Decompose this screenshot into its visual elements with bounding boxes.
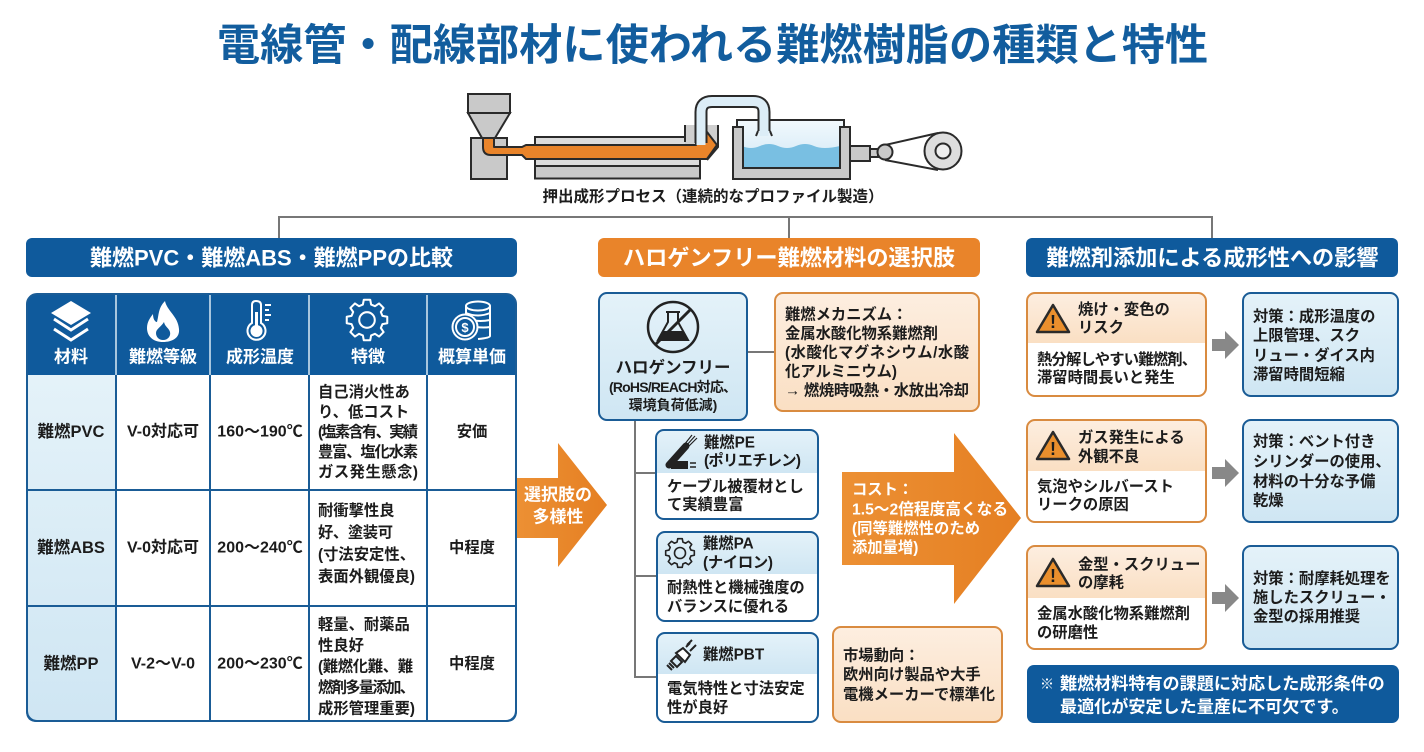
panel: market trend: 市場動向： [843, 646, 920, 664]
arrow: options diversity: 多様性 [532, 506, 584, 526]
icon: warning [1037, 432, 1069, 459]
row: 難燃PVC: ガス発生懸念) [318, 463, 418, 481]
card: 難燃PE: 難燃PE [704, 434, 755, 452]
row: 難燃ABS: (寸法安定性、 [318, 546, 415, 564]
solution: vented cylinder: シリンダーの使用、 [1253, 452, 1391, 470]
solution: temperature control: リュー・ダイス内 [1253, 346, 1375, 364]
arrow: cost: コスト： [852, 482, 913, 498]
icon: flame [147, 301, 179, 342]
panel: halogen free [599, 293, 747, 420]
hopper [468, 94, 510, 179]
row: 難燃PVC: 160〜190℃ [217, 424, 303, 440]
solution: wear resistant: 施したスクリュー・ [1253, 588, 1391, 606]
issue card: gas: リークの原因 [1037, 496, 1129, 514]
haul-off roller and belt [850, 132, 962, 170]
cooling pipe [701, 102, 772, 145]
icon: warning: ! [1050, 566, 1056, 586]
arrow: cost [842, 433, 1021, 604]
panel: halogen free: ハロゲンフリー [615, 358, 731, 377]
icon: warning [1037, 305, 1069, 332]
issue card: wear: の研磨性 [1037, 624, 1098, 642]
card: 難燃PA: 難燃PA [703, 534, 754, 552]
solution: wear resistant: 金型の採用推奨 [1253, 608, 1360, 626]
arrow [1212, 584, 1239, 612]
row: 難燃ABS: 耐衝撃性良 [318, 502, 394, 520]
row: 難燃PP [43, 616, 495, 718]
table header labels: 材料 [54, 348, 88, 366]
row: 難燃ABS: 難燃ABS [37, 538, 105, 557]
panel: flame retardant mechanism: 金属水酸化物系難燃剤 [785, 324, 938, 342]
row: 難燃PP: (難燃化難、難 [318, 658, 413, 676]
solution: vented cylinder: 乾燥 [1253, 492, 1284, 510]
row: 難燃PP: 燃剤多量添加、 [318, 678, 415, 696]
arrow: options diversity [517, 443, 607, 567]
issue card: burn and discoloration [1027, 293, 1206, 396]
solution: temperature control: 対策：成形温度の [1253, 308, 1375, 326]
panel: halogen free: (RoHS/REACH対応、 [609, 379, 737, 395]
card: 難燃PE [656, 430, 818, 519]
panel: comparison table [27, 294, 516, 721]
issue card: burn and discoloration: 焼け・変色の [1078, 300, 1170, 318]
issue card: burn and discoloration: 滞留時間長いと発生 [1037, 368, 1175, 386]
arrow [1212, 331, 1239, 359]
extruder barrel [535, 125, 718, 178]
issue card: wear: の摩耗 [1078, 574, 1124, 592]
row: 難燃PVC: り、低コスト [318, 404, 409, 421]
icon: warning: ! [1050, 312, 1056, 332]
row: 難燃PP: 中程度 [449, 654, 495, 672]
card: 難燃PA: (ナイロン) [703, 554, 773, 572]
solution: wear resistant: 対策：耐摩耗処理を [1253, 570, 1391, 588]
solution: temperature control: 上限管理、スク [1253, 326, 1360, 344]
card: 難燃PE: て実績豊富 [667, 496, 744, 514]
solution: wear resistant [1243, 546, 1398, 649]
icon: no halogen flask [648, 302, 698, 352]
panel: market trend [833, 627, 1002, 722]
table header labels: 特徴 [351, 348, 385, 366]
card: 難燃PA [657, 532, 818, 621]
card: 難燃PBT [657, 633, 818, 722]
icon: warning [1037, 559, 1069, 586]
row: 難燃PVC: 難燃PVC [38, 422, 105, 441]
solution: vented cylinder: 対策：ベント付き [1253, 432, 1375, 450]
card: 難燃PBT: 難燃PBT [703, 646, 765, 664]
arrow: cost: 1.5〜2倍程度高くなる [852, 500, 1008, 518]
row: 難燃PP: 難燃PP [43, 654, 99, 673]
solution: vented cylinder: 材料の十分な予備 [1253, 472, 1375, 490]
card: 難燃PA: バランスに優れる [667, 598, 789, 616]
row: 難燃ABS: V-0対応可 [127, 538, 199, 556]
row: 難燃PVC: 自己消火性あ [318, 383, 410, 401]
heading: moldability: 難燃剤添加による成形性への影響 [1046, 246, 1379, 270]
panel: flame retardant mechanism: → 燃焼時吸熱・水放出冷却 [785, 382, 969, 400]
icon: gear [666, 539, 694, 567]
panel: flame retardant mechanism [775, 293, 979, 411]
table header labels: 概算単価 [438, 346, 506, 366]
heading: comparison: 難燃PVC・難燃ABS・難燃PPの比較 [90, 246, 453, 270]
issue card: gas: 外観不良 [1078, 448, 1139, 466]
table header labels: 成形温度 [226, 346, 294, 366]
icon: warning: ! [1050, 439, 1056, 459]
issue card: wear: 金型・スクリュー [1078, 556, 1200, 574]
row: 難燃PVC: V-0対応可 [127, 422, 199, 440]
row: 難燃ABS: 200〜240℃ [217, 540, 303, 556]
row: 難燃ABS: 表面外観優良) [318, 568, 415, 586]
solution: vented cylinder [1243, 420, 1398, 522]
footer note: 難燃材料特有の課題に対応した成形条件の [1060, 674, 1385, 694]
row: 難燃PVC: 豊富、塩化水素 [318, 443, 418, 461]
icon: layers [51, 301, 91, 340]
row: 難燃PVC: 安価 [457, 422, 487, 440]
row: 難燃PP: 性良好 [318, 636, 364, 654]
panel: halogen free: 環境負荷低減) [629, 397, 717, 413]
title: 電線管・配線部材に使われる難燃樹脂の種類と特性 [217, 22, 1208, 70]
icon: thermometer [248, 301, 271, 340]
row: 難燃ABS: 好、塗装可 [318, 524, 393, 542]
icon: coins: $ [461, 320, 469, 335]
row: 難燃PVC: (塩素含有、実績 [318, 423, 418, 441]
row: 難燃PVC [38, 383, 487, 481]
issue card: burn and discoloration: リスク [1078, 320, 1124, 336]
footer note: 最適化が安定した量産に不可欠です。 [1060, 696, 1349, 716]
panel: market trend: 欧州向け製品や大手 [843, 666, 981, 684]
card: 難燃PBT: 性が良好 [667, 698, 728, 716]
panel: flame retardant mechanism: 難燃メカニズム： [785, 306, 907, 324]
heading: halogen-free: ハロゲンフリー難燃材料の選択肢 [623, 246, 955, 270]
issue card: wear: 金属水酸化物系難燃剤 [1037, 604, 1190, 622]
panel: market trend: 電機メーカーで標準化 [843, 686, 995, 704]
arrow: cost: (同等難燃性のため [852, 520, 980, 538]
heading: comparison [26, 238, 517, 277]
issue card: wear [1027, 546, 1206, 649]
icon: plug [667, 640, 696, 670]
card: 難燃PA: 耐熱性と機械強度の [667, 578, 805, 596]
icon: cable [669, 435, 697, 467]
row: 難燃PP: 成形管理重要) [318, 700, 415, 718]
icon: gear [347, 300, 387, 340]
card: 難燃PE: ケーブル被覆材とし [667, 478, 804, 496]
table header labels [54, 346, 506, 366]
card: 難燃PBT: 電気特性と寸法安定 [667, 680, 805, 698]
table header labels: 難燃等級 [129, 346, 197, 366]
footer note: ※ [1040, 676, 1054, 692]
row: 難燃PP: 軽量、耐薬品 [318, 616, 410, 634]
row: 難燃PP: 200〜230℃ [217, 656, 303, 672]
row: 難燃ABS [37, 502, 495, 586]
heading: moldability [1026, 238, 1398, 277]
issue card: gas: ガス発生による [1078, 428, 1185, 446]
card: 難燃PE: (ポリエチレン) [704, 452, 801, 470]
arrow [1212, 459, 1239, 487]
arrow: options diversity: 選択肢の [524, 486, 592, 504]
icon: coins [452, 302, 490, 340]
solution: temperature control [1243, 293, 1398, 396]
process caption: 押出成形プロセス（連続的なプロファイル製造） [542, 186, 884, 206]
panel: flame retardant mechanism: 化アルミニウム) [785, 364, 897, 380]
extrusion process diagram [468, 94, 962, 206]
footer note [1027, 665, 1399, 723]
molten resin flow [483, 132, 717, 159]
heading: halogen-free [598, 238, 980, 277]
tree connector lines [635, 352, 775, 677]
panel: flame retardant mechanism: (水酸化マグネシウム/水酸 [785, 344, 970, 362]
connector lines [279, 217, 1212, 238]
issue card: gas [1027, 420, 1206, 522]
row: 難燃ABS: 中程度 [449, 538, 495, 556]
cooling water tank [733, 120, 850, 179]
issue card: burn and discoloration: 熱分解しやすい難燃剤、 [1037, 350, 1197, 368]
arrow: cost: 添加量増) [852, 538, 918, 556]
issue card: gas: 気泡やシルバースト [1037, 478, 1174, 496]
row: 難燃PP: V-2〜V-0 [131, 656, 195, 672]
solution: temperature control: 滞留時間短縮 [1253, 366, 1345, 384]
